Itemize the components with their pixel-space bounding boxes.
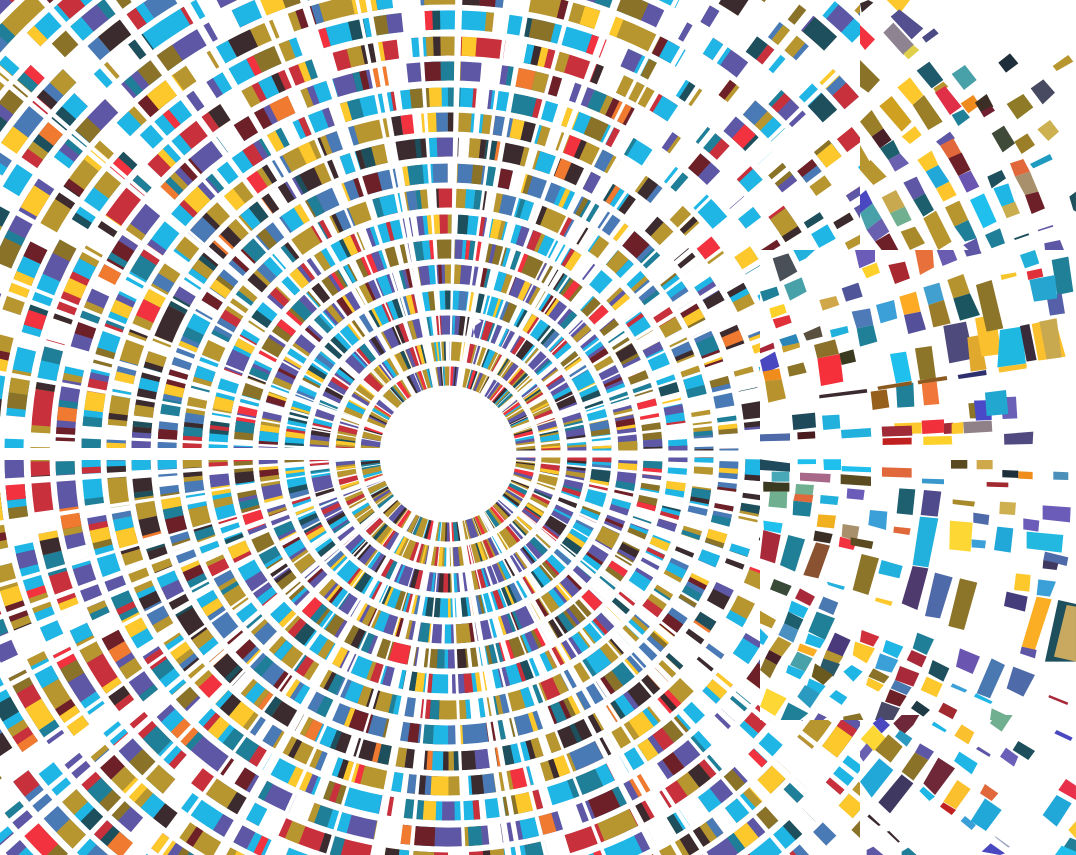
sparse blocks: upper right (860, 0, 1076, 250)
ring 3 (297, 303, 599, 605)
ring 8 (112, 118, 784, 790)
ring 11 (59, 65, 837, 843)
center hole (382, 388, 514, 520)
sparse blocks: lower right (760, 483, 1076, 720)
ring 1 (355, 361, 541, 547)
ring 9 (111, 117, 785, 791)
ring 7 (132, 138, 764, 770)
ring 4 (256, 262, 640, 646)
concentric rings (0, 0, 860, 855)
ring 10 (15, 21, 881, 855)
sparse blocks: right middle (760, 250, 1073, 490)
ring 5 (201, 207, 695, 701)
sparse blocks: bottom right (860, 715, 1076, 855)
ring 2 (302, 308, 594, 600)
ring 6 (192, 198, 704, 710)
